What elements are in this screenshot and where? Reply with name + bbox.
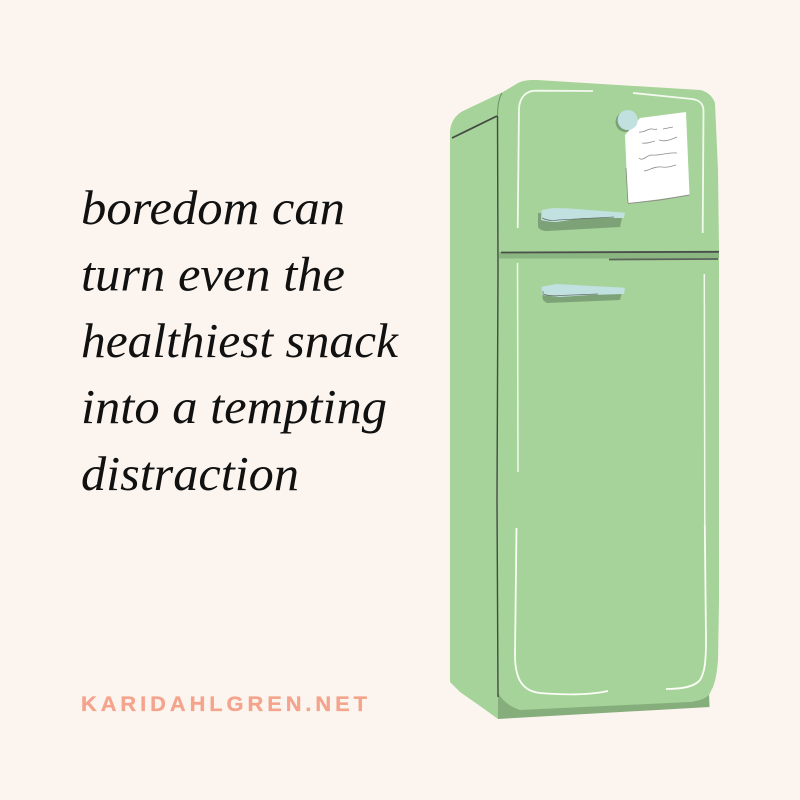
quote text: boredom can <box>81 182 345 235</box>
magnet shadow <box>616 112 636 132</box>
door gap lines <box>501 251 719 254</box>
fridge magnet <box>618 110 638 130</box>
quote text: into a tempting <box>81 381 387 434</box>
door gap shading <box>499 252 719 258</box>
fridge edge line <box>498 93 502 116</box>
website footer: KARIDAHLGREN.NET <box>81 692 371 716</box>
quote text: turn even the <box>81 248 345 302</box>
quote text: healthiest snack <box>81 315 399 368</box>
illustration: green refrigerator <box>450 80 719 719</box>
note with handwriting <box>625 112 690 204</box>
side top line <box>452 116 497 138</box>
quote text: distraction <box>81 448 299 501</box>
fridge side panel <box>450 92 505 719</box>
lower handle <box>542 284 625 303</box>
lower door highlight <box>516 263 519 472</box>
fridge base shadow <box>498 692 710 719</box>
upper door highlight <box>518 91 593 228</box>
quote text <box>81 182 399 501</box>
upper handle <box>538 208 625 231</box>
fridge front body <box>498 80 719 710</box>
